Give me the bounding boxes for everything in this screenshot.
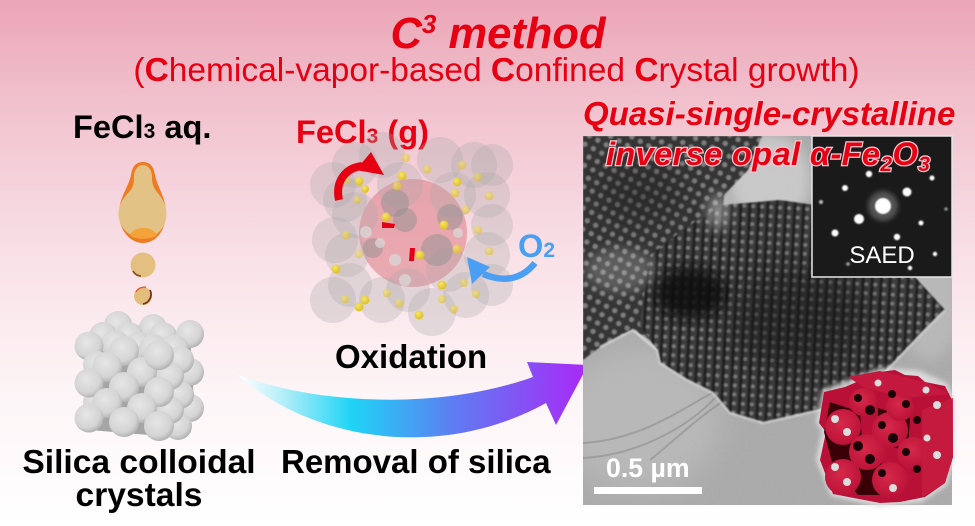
label: FeCl3 gas: FeCl3 (g) <box>296 113 429 150</box>
icon: oxidation sphere cluster <box>310 132 513 336</box>
label: Removal of silica: Removal of silica <box>281 443 551 480</box>
label: FeCl3 aq.: FeCl3 aq. <box>73 108 211 145</box>
crystal region main body <box>640 200 945 423</box>
heading: quasi-single-crystalline: O <box>892 136 918 172</box>
label: Silica colloidal crystals: Silica colloidal <box>22 444 256 481</box>
scale bar: 0.5 µm <box>606 453 690 483</box>
arrow: O2 entering <box>467 257 535 284</box>
scale bar <box>594 453 702 494</box>
label: Oxidation: Oxidation <box>335 338 487 375</box>
heading: quasi-single-crystalline: 3 <box>918 153 930 176</box>
panel: TEM micrograph <box>560 135 960 505</box>
heading: quasi-single-crystalline: inverse opal α-Fe <box>606 136 880 172</box>
label: Silica colloidal crystals <box>22 444 256 514</box>
heading: quasi-single-crystalline: 2 <box>879 153 892 176</box>
title: method <box>436 10 607 58</box>
title: C <box>390 10 422 58</box>
icon: silica colloidal crystal <box>74 311 204 441</box>
label: SAED: SAED <box>849 242 915 269</box>
heading: quasi-single-crystalline: Quasi-single-crystalline <box>583 95 955 132</box>
subtitle: (Chemical-vapor-based Confined Crystal growth) <box>133 52 860 89</box>
label: Silica colloidal crystals: crystals <box>76 477 202 514</box>
heading: quasi-single-crystalline <box>583 95 955 176</box>
label: O2: O2 <box>518 227 555 264</box>
icon: inverse opal cube <box>816 368 955 507</box>
folds in the support film <box>583 393 722 460</box>
core sphere <box>359 179 467 287</box>
inset: SAED pattern <box>812 136 952 277</box>
arrow: FeCl3 entering <box>338 152 384 200</box>
arrow: process gradient arrow <box>238 362 588 437</box>
crystal region upper left <box>583 136 762 360</box>
title: 3 <box>422 9 437 39</box>
icon: FeCl3 droplets <box>118 162 166 305</box>
